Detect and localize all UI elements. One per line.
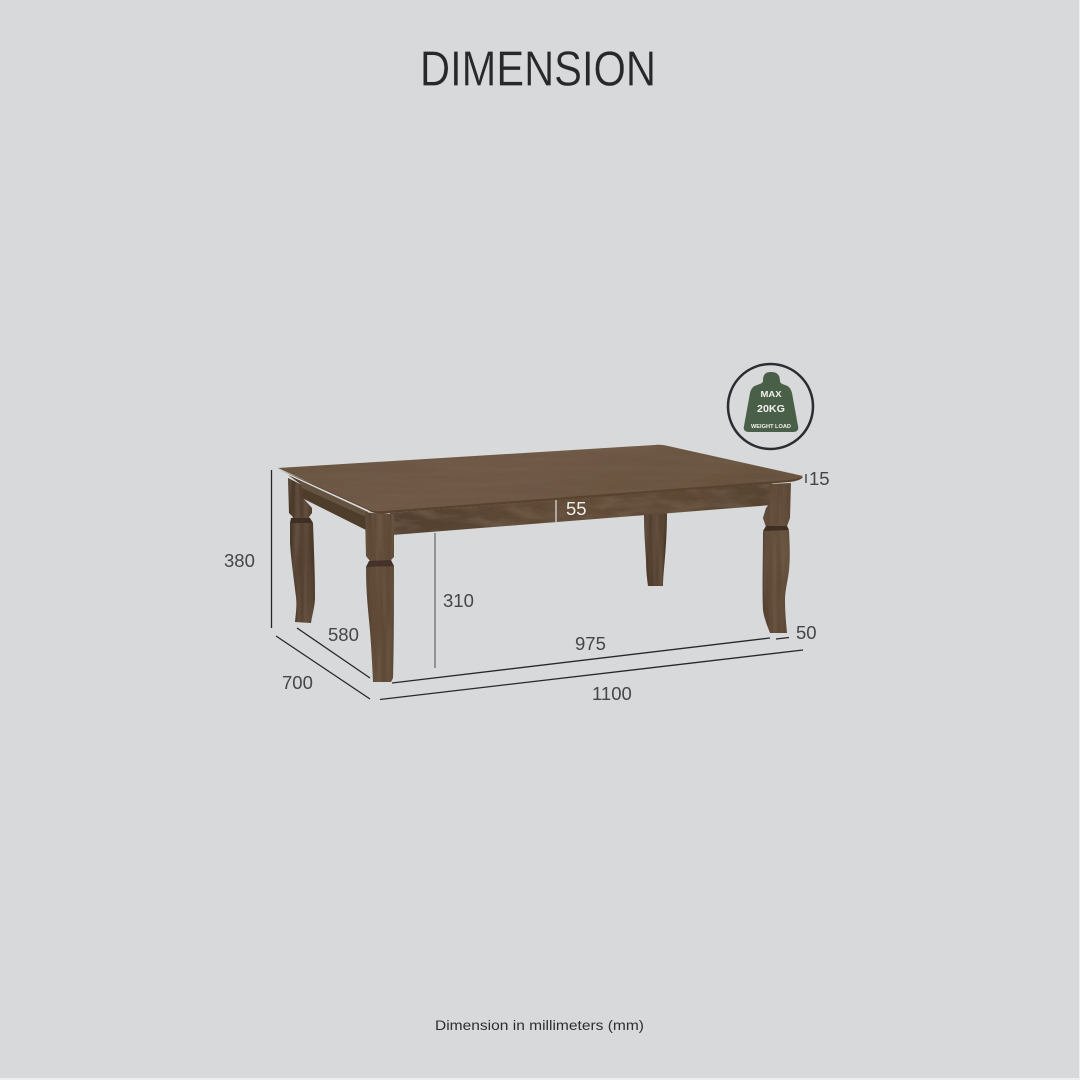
dimension: top thickness 15: 15 <box>809 468 830 489</box>
left apron <box>288 475 368 530</box>
dimension: clearance height 310: 310 <box>443 590 474 611</box>
back left leg collar <box>290 518 313 523</box>
back right leg <box>644 511 667 586</box>
badge text: weight load: WEIGHT LOAD <box>751 424 791 430</box>
left apron light edge <box>300 481 368 517</box>
dimension: inner width 975: 975 <box>575 633 606 654</box>
right leg collar <box>763 526 789 531</box>
badge text: max: MAX <box>760 389 782 399</box>
front left leg collar <box>366 560 394 567</box>
icon: kettlebell weight <box>744 372 798 432</box>
weight load badge <box>728 364 813 449</box>
front apron <box>390 483 772 535</box>
dimension: inner width 975 <box>392 633 770 683</box>
dimension: apron height 55: 55 <box>566 498 587 519</box>
badge text: 20KG: 20KG <box>757 403 785 415</box>
footnote: Dimension in millimeters (mm) <box>435 1018 644 1033</box>
coffee table <box>278 445 803 682</box>
dimension: leg width 50: 50 <box>796 622 817 643</box>
table top surface <box>278 445 803 511</box>
dimension: overall depth 700: 700 <box>282 672 313 693</box>
dimension: overall width 1100: 1100 <box>592 683 632 704</box>
dimension: clearance height 310 <box>435 533 474 668</box>
dimension: overall height 380: 380 <box>224 550 255 571</box>
dimension: inner depth 580: 580 <box>328 624 359 645</box>
dimension: overall width 1100 <box>380 650 803 704</box>
dimension: overall depth 700 <box>276 636 370 699</box>
dimension: leg width 50 <box>776 622 817 643</box>
back left leg <box>288 478 315 623</box>
dimension: apron height 55 <box>556 498 587 522</box>
title: DIMENSION <box>420 42 656 96</box>
table top edge <box>278 469 803 514</box>
right leg <box>763 483 791 633</box>
dimension: inner depth 580 <box>297 624 370 678</box>
front left leg <box>365 512 394 682</box>
